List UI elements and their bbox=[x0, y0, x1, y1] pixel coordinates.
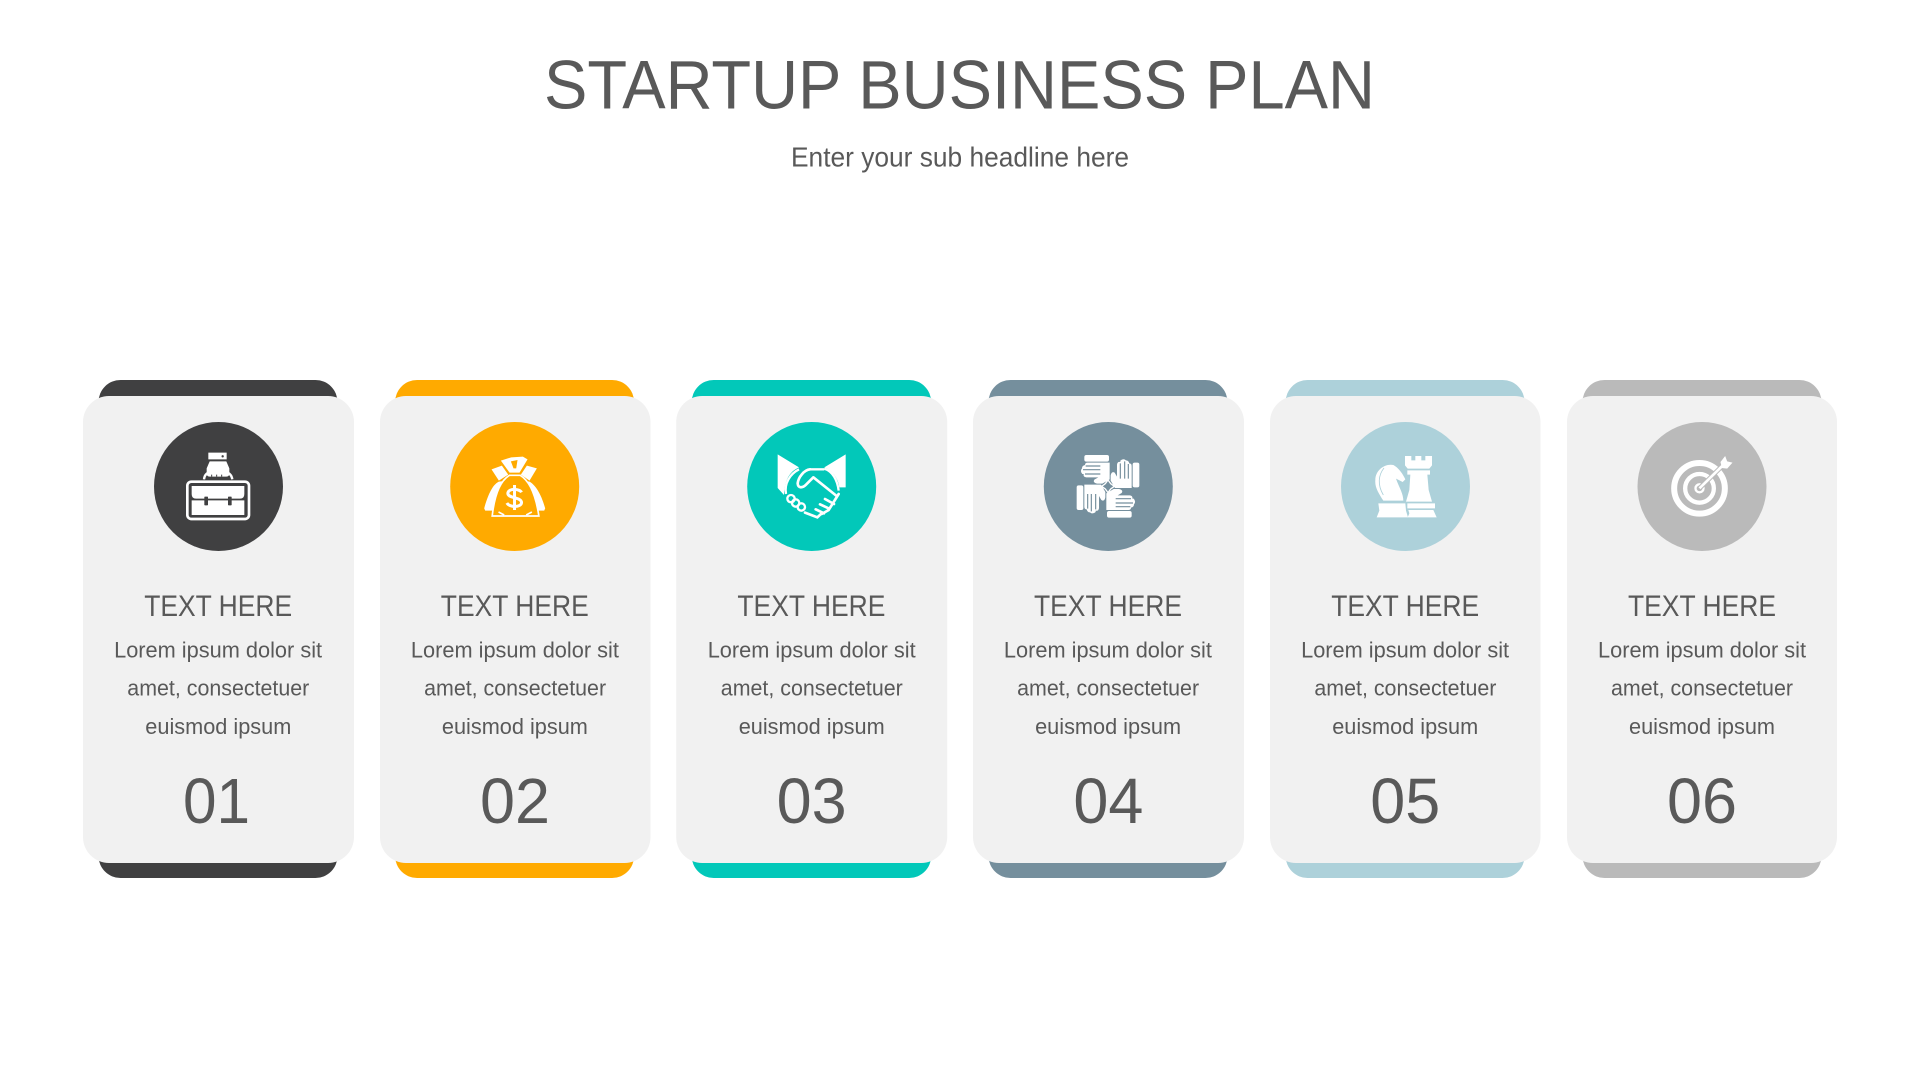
heading: TEXT HERE bbox=[1034, 590, 1182, 623]
body text bbox=[708, 637, 916, 739]
number: 03 bbox=[777, 765, 847, 837]
panel: card 03 bbox=[676, 380, 947, 878]
panel: card 02 bbox=[380, 380, 650, 878]
number: 06 bbox=[1667, 765, 1737, 837]
body text bbox=[411, 637, 619, 739]
body text: Lorem ipsum dolor sit bbox=[114, 637, 322, 662]
body text: Lorem ipsum dolor sit bbox=[1004, 637, 1212, 662]
body text: amet, consectetuer bbox=[1611, 676, 1793, 701]
body text: euismod ipsum bbox=[442, 714, 588, 739]
body text: Lorem ipsum dolor sit bbox=[708, 637, 916, 662]
heading: TEXT HERE bbox=[144, 590, 292, 623]
body text: euismod ipsum bbox=[1332, 714, 1478, 739]
title: STARTUP BUSINESS PLAN bbox=[544, 46, 1375, 124]
number: 05 bbox=[1370, 765, 1440, 837]
icon: handshake bbox=[747, 422, 876, 551]
heading: TEXT HERE bbox=[1628, 590, 1776, 623]
body text bbox=[1598, 637, 1806, 739]
body text bbox=[1301, 637, 1509, 739]
number: 01 bbox=[183, 765, 250, 837]
body text bbox=[1004, 637, 1212, 739]
icon: money bag bbox=[450, 422, 579, 551]
panel: card 06 bbox=[1567, 380, 1837, 878]
body text: euismod ipsum bbox=[145, 714, 291, 739]
panel: card 05 bbox=[1270, 380, 1540, 878]
body text: amet, consectetuer bbox=[424, 676, 606, 701]
panel: card 04 bbox=[973, 380, 1244, 878]
body text: Lorem ipsum dolor sit bbox=[1301, 637, 1509, 662]
panel: card 01 bbox=[83, 380, 354, 878]
body text: euismod ipsum bbox=[739, 714, 885, 739]
icon: four hands bbox=[1044, 422, 1173, 551]
number: 02 bbox=[480, 765, 550, 837]
body text: Lorem ipsum dolor sit bbox=[411, 637, 619, 662]
body text: amet, consectetuer bbox=[721, 676, 903, 701]
body text: Lorem ipsum dolor sit bbox=[1598, 637, 1806, 662]
body text bbox=[114, 637, 322, 739]
heading: TEXT HERE bbox=[441, 590, 589, 623]
body text: euismod ipsum bbox=[1629, 714, 1775, 739]
heading: TEXT HERE bbox=[737, 590, 885, 623]
subtitle: Enter your sub headline here bbox=[791, 142, 1129, 172]
body text: amet, consectetuer bbox=[127, 676, 309, 701]
body text: amet, consectetuer bbox=[1314, 676, 1496, 701]
icon: briefcase bbox=[154, 422, 283, 551]
heading: TEXT HERE bbox=[1331, 590, 1479, 623]
icon: target with arrow bbox=[1638, 422, 1766, 551]
icon: chess pieces bbox=[1341, 422, 1470, 551]
number: 04 bbox=[1073, 765, 1143, 837]
body text: euismod ipsum bbox=[1035, 714, 1181, 739]
body text: amet, consectetuer bbox=[1017, 676, 1199, 701]
